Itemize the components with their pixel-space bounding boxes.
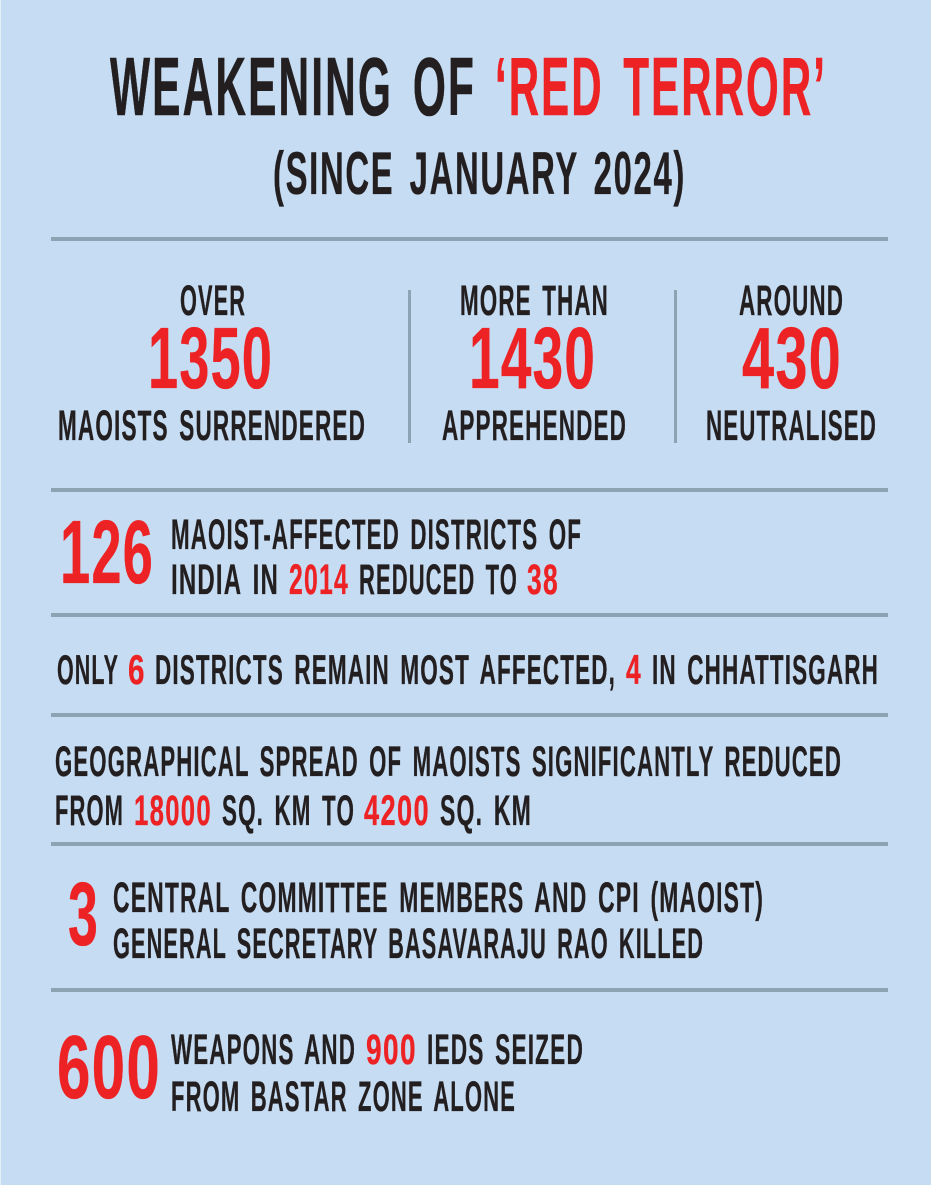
panel: most affected districts: 4: [626, 646, 642, 693]
stat: apprehended: APPREHENDED: [442, 402, 627, 450]
text: districts reduced: 2014: [289, 556, 349, 604]
stat: maoists surrendered: [58, 277, 366, 450]
panel: geographical spread: 4200: [364, 787, 430, 835]
text: weapons and IEDs: FROM BASTAR ZONE ALONE: [171, 1073, 516, 1121]
stat: maoists surrendered: 1350: [148, 310, 273, 407]
panel: most affected districts: ONLY: [57, 646, 119, 693]
stat: apprehended: 1430: [469, 310, 596, 407]
stat: maoists surrendered: MAOISTS SURRENDERED: [58, 402, 366, 450]
stat: maoists surrendered: OVER: [180, 277, 246, 325]
text: districts reduced: INDIA IN: [171, 556, 279, 604]
number: 3: 3: [68, 865, 99, 965]
text: districts reduced: [171, 511, 582, 604]
panel: headline stats: [58, 277, 877, 450]
stat: neutralised: 430: [742, 310, 842, 407]
panel: weapons seized: [57, 1018, 584, 1121]
text: districts reduced: REDUCED TO: [359, 556, 518, 604]
title: WEAKENING OF: [110, 40, 476, 133]
panel: geographical spread: 18000: [134, 787, 212, 835]
number: 126: 126: [60, 503, 154, 603]
panel: geographical spread: SQ. KM: [440, 787, 532, 835]
panel: geographical spread: FROM: [55, 787, 124, 835]
panel: geographical spread: SQ. KM TO: [222, 787, 355, 835]
stat: apprehended: MORE THAN: [460, 277, 609, 325]
text: weapons and IEDs: IEDS SEIZED: [427, 1026, 584, 1074]
stat: neutralised: [706, 277, 877, 450]
stat: apprehended: [442, 277, 627, 450]
panel: geographical spread: [55, 738, 842, 835]
panel: most affected districts: 6: [128, 646, 146, 693]
number: 600: 600: [57, 1018, 161, 1118]
text: committee members: [113, 874, 764, 968]
panel: central committee members killed: [68, 865, 764, 968]
text: weapons and IEDs: [171, 1026, 584, 1121]
panel: affected districts: [60, 503, 582, 604]
text: weapons and IEDs: 900: [366, 1026, 417, 1074]
text: districts reduced: 38: [527, 556, 559, 604]
text: weapons and IEDs: WEAPONS AND: [171, 1026, 356, 1074]
